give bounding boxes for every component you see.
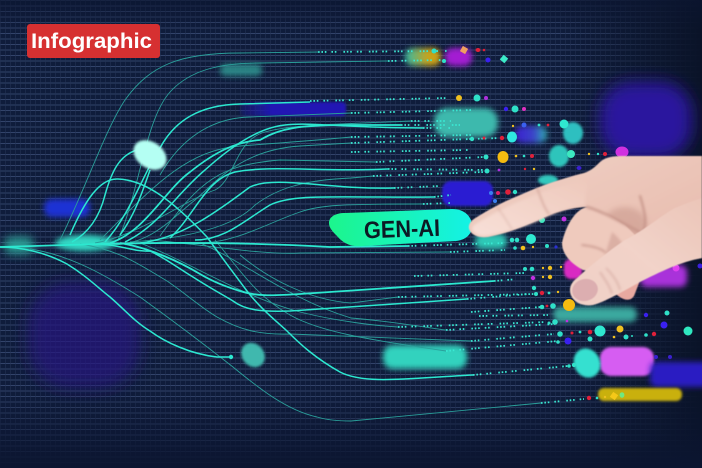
index fingertip highlight [472,178,588,236]
gen-ai label: GEN-AI [364,215,440,244]
network lines: bright strands [0,102,494,380]
infographic badge [27,24,160,58]
thumb [570,198,702,305]
data dots: coloured points [229,46,702,400]
badge label: Infographic [31,30,152,53]
fold shadow [600,232,626,272]
hand pointing at the pill [469,156,702,305]
underside finger [600,268,641,300]
knuckle shading [497,188,645,252]
data dots: dashed strands [310,51,584,403]
glowing node on the strands [128,134,172,176]
blurred colour blobs: right [383,48,702,401]
blurred colour blobs: left and centre [4,64,346,388]
gen-ai pill button [329,209,472,246]
network lines: dim strands [30,52,541,421]
back of hand and index finger [469,156,702,270]
thumb knuckle creases [600,268,620,294]
curled middle finger [562,207,640,275]
palm shadow [603,207,647,243]
thumb nail [570,276,600,304]
